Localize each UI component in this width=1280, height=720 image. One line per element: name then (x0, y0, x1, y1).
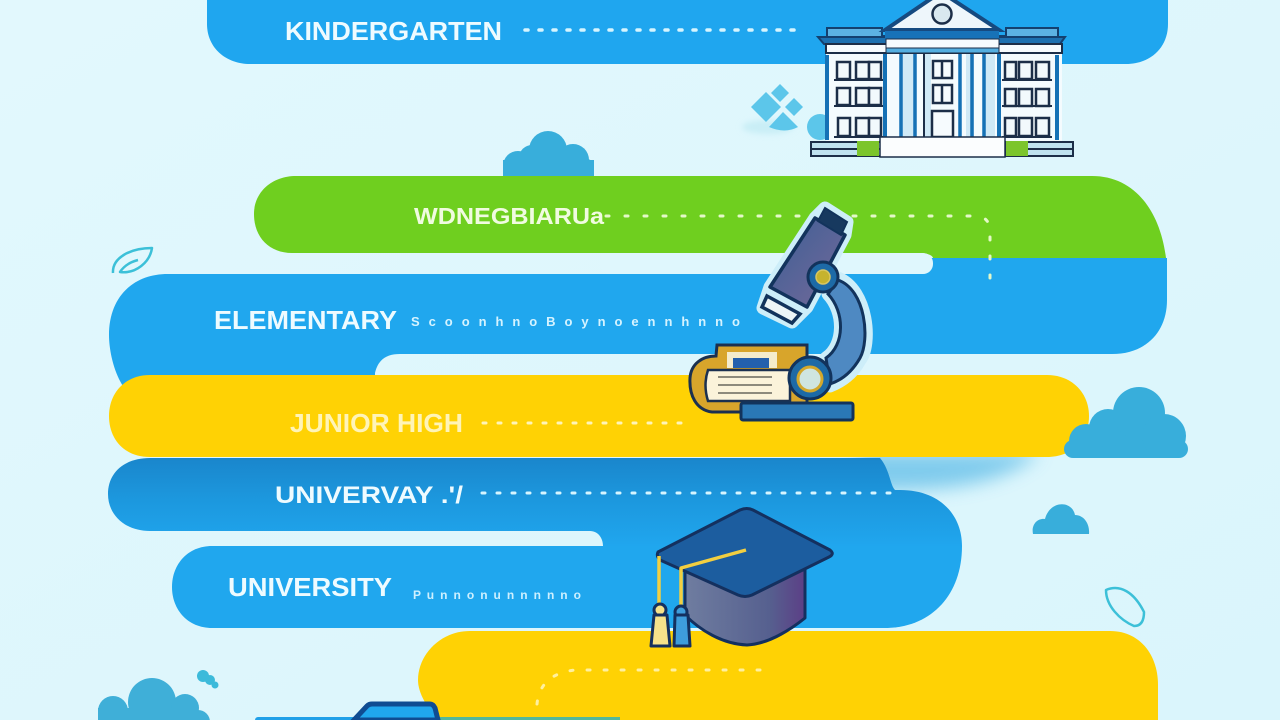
dotted line: green stage (606, 216, 990, 292)
cloud: bottom left (98, 678, 210, 720)
label: university upper: UNIVERVAY .'/ (275, 482, 463, 509)
caption: elementary: S c o o n h n o B o y n o e n n h n n o (411, 314, 740, 329)
label: kindergarten: KINDERGARTEN (285, 16, 502, 46)
light strip between green and blue (600, 253, 933, 274)
tassel cord (659, 550, 746, 610)
microscope halo (763, 208, 866, 386)
tassel blue (674, 606, 690, 646)
microscope knob (808, 262, 838, 292)
cap body (685, 568, 805, 645)
cloud: right small (1033, 504, 1089, 534)
label: university: UNIVERSITY (228, 572, 392, 602)
microscope barrel (770, 218, 845, 307)
icon: microscope and book (690, 208, 866, 420)
icon: small blob (197, 670, 218, 688)
windows: side wings (837, 62, 1049, 136)
icon: leaf outline left (113, 248, 152, 273)
steps (811, 142, 901, 149)
microscope wheel (789, 357, 831, 399)
icon: briefcase handle (354, 704, 438, 720)
band: university upper (108, 458, 962, 546)
caption: university: P u n n o n u n n n n n o (413, 588, 581, 602)
band: bottom yellow (418, 631, 1158, 720)
mortarboard (657, 508, 832, 596)
label: junior high: JUNIOR HIGH (290, 408, 463, 438)
icon: diamond decoration (742, 84, 833, 140)
shadow below junior high band (860, 452, 1040, 490)
dotted line: bottom yellow (537, 670, 760, 704)
book (690, 345, 807, 412)
microscope base (741, 403, 853, 420)
band: bottom blue and green strip (255, 717, 620, 720)
dotted line: kindergarten (525, 28, 800, 32)
tassel yellow (651, 604, 670, 646)
icon: school building (811, 0, 1073, 157)
label: elementary: ELEMENTARY (214, 305, 397, 335)
dotted line: university upper (482, 492, 895, 494)
icon: graduation cap (651, 508, 832, 646)
band: university (172, 546, 962, 628)
microscope arm (826, 280, 865, 384)
label: green stage: WDNEGBIARUa (414, 203, 604, 229)
band: elementary (109, 258, 1167, 395)
band: green stage (254, 176, 1166, 292)
band: junior high (109, 375, 1089, 457)
cloud: upper middle (503, 131, 594, 181)
icon: leaf outline right (1106, 588, 1144, 626)
band: kindergarten (207, 0, 1168, 64)
cloud: right large (1064, 387, 1188, 458)
dotted line: junior high (483, 422, 690, 424)
windows: centre (932, 61, 953, 137)
